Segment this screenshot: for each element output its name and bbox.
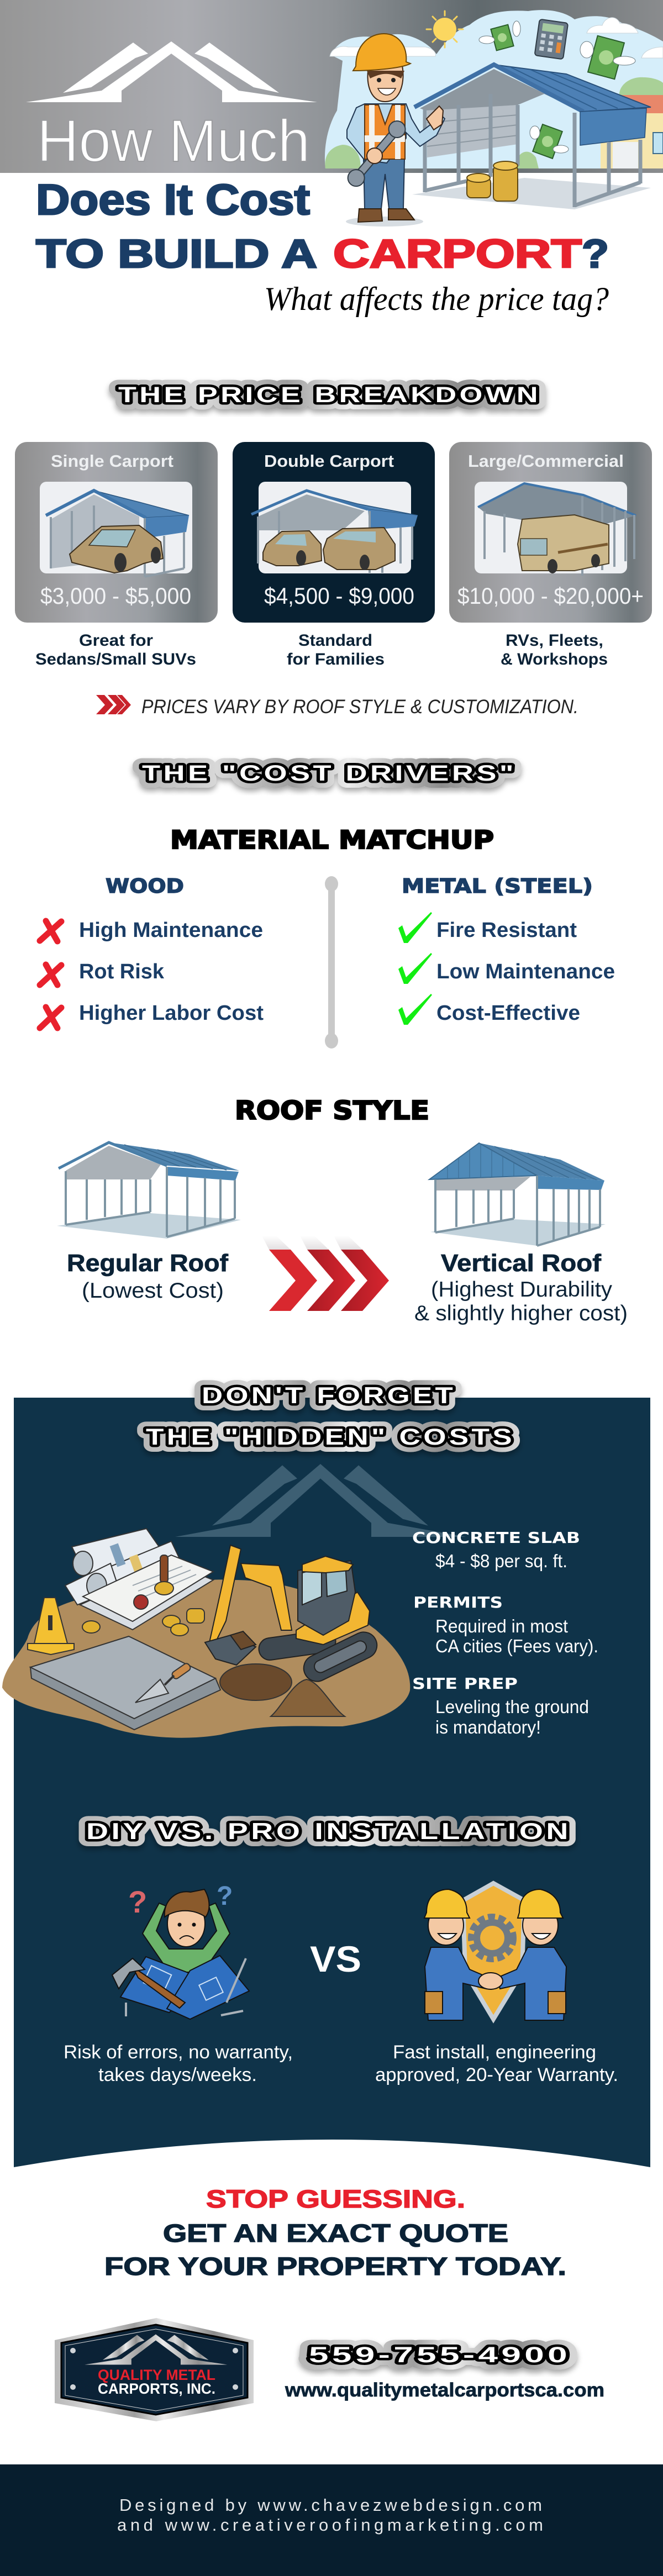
label: vertical roof: (Highest Durability bbox=[431, 1278, 613, 1302]
heading: Material Matchup: MATERIAL MATCHUP bbox=[170, 825, 494, 855]
section heading: The Cost Drivers: THE "COST DRIVERS" bbox=[142, 761, 517, 786]
caption: pro: approved, 20-Year Warranty. bbox=[375, 2064, 618, 2085]
section heading: The Cost Drivers: THE "COST DRIVERS" bbox=[142, 761, 517, 786]
website: www.qualitymetalcarportsca.com bbox=[285, 2379, 604, 2401]
section heading: DIY vs Pro Installation: DIY VS. PRO INSTALLATION bbox=[86, 1818, 571, 1844]
divider bbox=[325, 876, 338, 1049]
caption: pro bbox=[375, 2042, 618, 2085]
text block: site prep: Leveling the ground bbox=[435, 1697, 589, 1717]
heading: Roof Style: ROOF STYLE bbox=[235, 1095, 429, 1125]
card title: Double Carport bbox=[264, 451, 394, 471]
carport bbox=[414, 65, 651, 207]
caption: pro: Fast install, engineering bbox=[393, 2042, 596, 2063]
image panel bbox=[475, 482, 627, 573]
text block: site prep bbox=[412, 1674, 589, 1737]
section heading: Don't Forget The Hidden Costs bbox=[146, 1382, 515, 1450]
panel: single carport bbox=[15, 442, 218, 623]
label: vertical roof bbox=[414, 1250, 628, 1325]
footer credit bbox=[117, 2495, 543, 2535]
blueprint rolls bbox=[65, 1529, 182, 1605]
worker bbox=[345, 34, 445, 226]
card captions: & Workshops bbox=[501, 650, 608, 668]
phone number: 559-755-4900 bbox=[309, 2343, 571, 2367]
card captions: Great for bbox=[79, 631, 153, 650]
footer bbox=[0, 2464, 663, 2576]
body bbox=[296, 1592, 370, 1645]
icon: small chevrons bbox=[96, 695, 131, 714]
text block: site prep: is mandatory! bbox=[435, 1717, 541, 1737]
left pro bbox=[424, 1889, 489, 2020]
label: regular roof: (Lowest Cost) bbox=[82, 1279, 224, 1303]
shield bbox=[463, 1883, 524, 2019]
company logo badge bbox=[55, 2318, 254, 2421]
label: vertical roof: & slightly higher cost) bbox=[414, 1302, 628, 1325]
stick bbox=[209, 1545, 241, 1642]
illustration: site prep scene bbox=[2, 1529, 410, 1738]
text block: site prep: SITE PREP bbox=[412, 1674, 518, 1693]
price: $4,500 - $9,000 bbox=[264, 583, 414, 609]
note with chevrons bbox=[96, 695, 578, 718]
icon: regular roof carport bbox=[57, 1142, 241, 1239]
header illustration bbox=[325, 10, 663, 226]
title: To Build A Carport bbox=[36, 232, 609, 276]
section heading: Don't Forget The Hidden Costs: DON'T FORGET bbox=[202, 1382, 456, 1408]
label: vertical roof: Vertical Roof bbox=[441, 1250, 601, 1277]
bushes bbox=[325, 77, 663, 168]
logo: roof mark bbox=[26, 41, 317, 102]
section heading: The Price Breakdown: THE PRICE BREAKDOWN bbox=[118, 383, 541, 407]
section heading: The Price Breakdown: THE PRICE BREAKDOWN bbox=[118, 383, 541, 407]
metal items: Fire Resistant bbox=[436, 919, 577, 942]
text block: permits: CA cities (Fees vary). bbox=[435, 1636, 598, 1656]
footer credit: and www.creativeroofingmarketing.com bbox=[117, 2515, 543, 2535]
card captions: RVs, Fleets, bbox=[506, 631, 603, 650]
wood items: High Maintenance bbox=[79, 919, 263, 942]
price: $10,000 - $20,000+ bbox=[457, 583, 644, 609]
section heading: Don't Forget The Hidden Costs: DON'T FORGET bbox=[202, 1382, 456, 1408]
head bbox=[167, 1900, 205, 1947]
company logo badge: CARPORTS, INC. bbox=[98, 2380, 215, 2397]
excavator bbox=[205, 1545, 381, 1686]
slab bbox=[30, 1636, 220, 1730]
header band bbox=[0, 0, 663, 173]
question marks: ? bbox=[128, 1884, 147, 1919]
call to action bbox=[104, 2185, 566, 2280]
text: VS: VS bbox=[310, 1938, 361, 1979]
right pro bbox=[497, 1889, 566, 2020]
panel: large commercial bbox=[449, 442, 652, 623]
icon: vertical roof carport bbox=[429, 1143, 606, 1246]
card title: Large/Commercial bbox=[468, 451, 624, 471]
hammer bbox=[112, 1958, 185, 2008]
icon: two pros and shield bbox=[424, 1883, 566, 2020]
hole and dirt bbox=[220, 1664, 345, 1716]
title: Does It Cost: Does It Cost bbox=[36, 175, 310, 224]
list: wood drawbacks bbox=[40, 919, 264, 1028]
image panel bbox=[259, 482, 411, 573]
sky bbox=[325, 10, 663, 168]
sun bbox=[427, 11, 463, 48]
footer credit: Designed by www.chavezwebdesign.com bbox=[119, 2495, 542, 2515]
arrow: chevrons bbox=[262, 1236, 389, 1311]
section heading: The Cost Drivers: THE "COST DRIVERS" bbox=[142, 761, 517, 786]
ground bbox=[2, 1579, 410, 1738]
icon: single carport with car bbox=[46, 491, 189, 577]
handshake bbox=[478, 1973, 503, 1989]
house bbox=[601, 95, 663, 168]
icon: confused DIYer bbox=[112, 1882, 249, 2019]
text block: concrete slab: CONCRETE SLAB bbox=[412, 1529, 580, 1547]
cab bbox=[298, 1561, 355, 1635]
text block: permits bbox=[413, 1593, 598, 1656]
panel: hidden costs and DIY vs pro bbox=[14, 1398, 650, 2167]
note text: PRICES VARY BY ROOF STYLE & CUSTOMIZATION. bbox=[141, 696, 578, 718]
section heading: The Price Breakdown: THE PRICE BREAKDOWN bbox=[118, 383, 541, 407]
badge name: QUALITY METAL bbox=[98, 2367, 215, 2383]
tracks bbox=[257, 1629, 337, 1662]
badge roof mark bbox=[85, 2335, 227, 2364]
coins bbox=[82, 1609, 204, 1636]
caption: DIY: takes days/weeks. bbox=[98, 2064, 257, 2085]
title: How Much: How Much bbox=[37, 107, 310, 174]
cone bbox=[28, 1598, 74, 1655]
text block: concrete slab bbox=[412, 1529, 580, 1571]
caption: DIY: Risk of errors, no warranty, bbox=[64, 2042, 293, 2063]
icon: check marks bbox=[398, 912, 432, 1025]
call to action: FOR YOUR PROPERTY TODAY. bbox=[104, 2252, 566, 2280]
call to action: STOP GUESSING. bbox=[206, 2185, 465, 2213]
wood items: Higher Labor Cost bbox=[79, 1002, 264, 1025]
text block: permits: PERMITS bbox=[413, 1593, 503, 1611]
permit papers bbox=[80, 1555, 213, 1630]
card captions: Standard bbox=[298, 631, 372, 650]
bucket bbox=[205, 1635, 256, 1665]
column heading: Wood: WOOD bbox=[106, 875, 184, 898]
text block: permits: Required in most bbox=[435, 1616, 568, 1636]
watermark: roof mark bbox=[175, 1464, 466, 1537]
list: metal benefits bbox=[398, 912, 615, 1025]
section heading: DIY vs Pro Installation: DIY VS. PRO INSTALLATION bbox=[86, 1818, 571, 1844]
icon: large carport with RV bbox=[478, 483, 636, 576]
phone number: 559-755-4900 bbox=[309, 2343, 571, 2367]
icon: x marks bbox=[40, 921, 61, 1028]
icon: confused DIYer: ? bbox=[217, 1882, 233, 1911]
clouds bbox=[330, 18, 663, 58]
title: To Build A Carport: ? bbox=[582, 232, 609, 276]
title: To Build A Carport: TO BUILD A bbox=[36, 232, 317, 276]
card captions bbox=[35, 631, 608, 668]
card captions: Sedans/Small SUVs bbox=[35, 650, 196, 668]
wood items bbox=[79, 919, 264, 1025]
wood items: Rot Risk bbox=[79, 960, 165, 983]
calculator bbox=[535, 19, 568, 59]
floor bbox=[412, 178, 651, 209]
section heading: Don't Forget The Hidden Costs: DON'T FORGET bbox=[202, 1382, 456, 1408]
panel: double carport bbox=[233, 442, 435, 623]
trowel bbox=[135, 1662, 192, 1703]
screws bbox=[70, 2348, 238, 2390]
call to action: GET AN EXACT QUOTE bbox=[163, 2219, 508, 2247]
caption: DIY bbox=[64, 2042, 293, 2085]
metal items bbox=[436, 919, 615, 1025]
icon: double carport with two cars bbox=[251, 491, 418, 573]
nails bbox=[126, 1958, 246, 2016]
subtitle: What affects the price tag? bbox=[264, 281, 609, 317]
label: regular roof bbox=[67, 1250, 228, 1303]
coins bbox=[467, 161, 518, 201]
image panel bbox=[40, 482, 192, 573]
metal items: Cost-Effective bbox=[436, 1002, 580, 1025]
blueprints bbox=[120, 1957, 203, 2013]
price: $3,000 - $5,000 bbox=[40, 583, 191, 609]
section heading: Don't Forget The Hidden Costs: THE "HIDDEN" COSTS bbox=[146, 1424, 515, 1450]
section heading: DIY vs Pro Installation: DIY VS. PRO INSTALLATION bbox=[86, 1818, 571, 1844]
column heading: Metal: METAL (STEEL) bbox=[402, 875, 593, 898]
phone number: 559-755-4900 bbox=[309, 2343, 571, 2367]
phone number bbox=[309, 2343, 571, 2367]
boom bbox=[241, 1563, 292, 1630]
text block: concrete slab: $4 - $8 per sq. ft. bbox=[435, 1551, 567, 1571]
arms and shirt bbox=[143, 1903, 230, 1972]
title: To Build A Carport: CARPORT bbox=[333, 232, 582, 276]
card title: Single Carport bbox=[51, 451, 173, 471]
gear bbox=[472, 1918, 512, 1958]
label: regular roof: Regular Roof bbox=[67, 1250, 228, 1277]
flying money bbox=[479, 21, 635, 159]
card captions: for Families bbox=[287, 650, 385, 668]
section heading: Don't Forget The Hidden Costs: THE "HIDDEN" COSTS bbox=[146, 1424, 515, 1450]
section heading: Don't Forget The Hidden Costs: THE "HIDDEN" COSTS bbox=[146, 1424, 515, 1450]
metal items: Low Maintenance bbox=[436, 960, 615, 983]
